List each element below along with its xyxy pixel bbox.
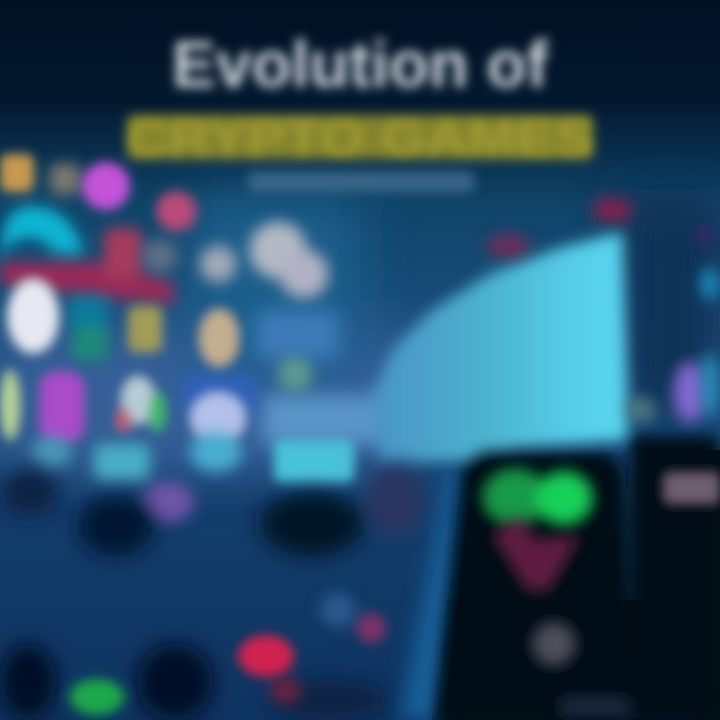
pale lead-in of the chart — [262, 395, 392, 445]
subtitle — [248, 172, 474, 192]
icon: cyan figure — [700, 353, 720, 417]
icon: sky tile 1 — [32, 436, 72, 468]
icon: sage tile — [278, 357, 312, 391]
icon: tan tile — [50, 164, 80, 194]
icon: red tile — [104, 228, 142, 278]
phone body — [434, 452, 636, 720]
game icon grid — [0, 154, 354, 522]
area chart — [262, 197, 632, 462]
panel label — [664, 473, 720, 503]
chart mid marker — [486, 234, 530, 258]
icon: bright teal tile — [274, 440, 354, 482]
icon: purple tile — [40, 372, 84, 442]
icon: lime tile — [0, 370, 20, 440]
icon: sky tile 3 — [190, 432, 242, 472]
icon: grey tile — [143, 239, 177, 273]
icon: top right purple dot — [694, 224, 714, 248]
icon: crimson blob — [238, 635, 294, 677]
icon: teal and green tile — [68, 296, 108, 360]
title line: Crypto Games: CRYPTO GAMES — [127, 110, 593, 166]
phone edge glow — [400, 470, 466, 720]
icon: amber tile — [128, 306, 162, 352]
red band — [0, 262, 174, 304]
phone caption — [560, 696, 710, 718]
dark lower-right base — [432, 600, 720, 720]
icon: pink tile — [156, 191, 196, 231]
icon: beige tile — [199, 309, 239, 367]
icon: cyan arch — [0, 206, 84, 262]
icon: violet tile — [142, 482, 194, 522]
icon: top right cyan dot — [700, 268, 720, 300]
icon: royal blue tile — [184, 374, 256, 414]
icon: light grey tile — [200, 246, 236, 282]
icon: magenta tile — [82, 162, 130, 210]
red and green buttons — [70, 593, 386, 715]
title — [127, 27, 593, 192]
icon: lavender tile — [190, 392, 246, 444]
title line: Evolution of: Evolution of — [172, 27, 549, 101]
icon: orange tile — [0, 154, 34, 192]
phone green logo — [483, 469, 592, 525]
mid-blue haze — [0, 190, 720, 470]
icon: green blob — [70, 679, 124, 715]
icon: dark red blob — [270, 677, 300, 703]
icon: multicolour tile — [116, 376, 166, 432]
icon: magenta dot — [356, 613, 386, 643]
phone round button — [533, 623, 575, 665]
foreground silhouettes — [0, 464, 423, 720]
icon: blue tile — [256, 310, 340, 360]
icon: blue dot — [321, 593, 355, 627]
icon: grey marker — [625, 398, 655, 422]
chart peak marker — [592, 197, 632, 223]
icon: silver cluster — [250, 222, 328, 298]
icon: sky tile 2 — [94, 444, 150, 480]
right dark base — [650, 450, 720, 720]
phone red logo — [493, 516, 580, 590]
right side dark panel — [630, 436, 720, 720]
icon: purple figure — [674, 362, 706, 422]
phone device — [400, 452, 710, 720]
icon: white tile — [7, 279, 59, 353]
